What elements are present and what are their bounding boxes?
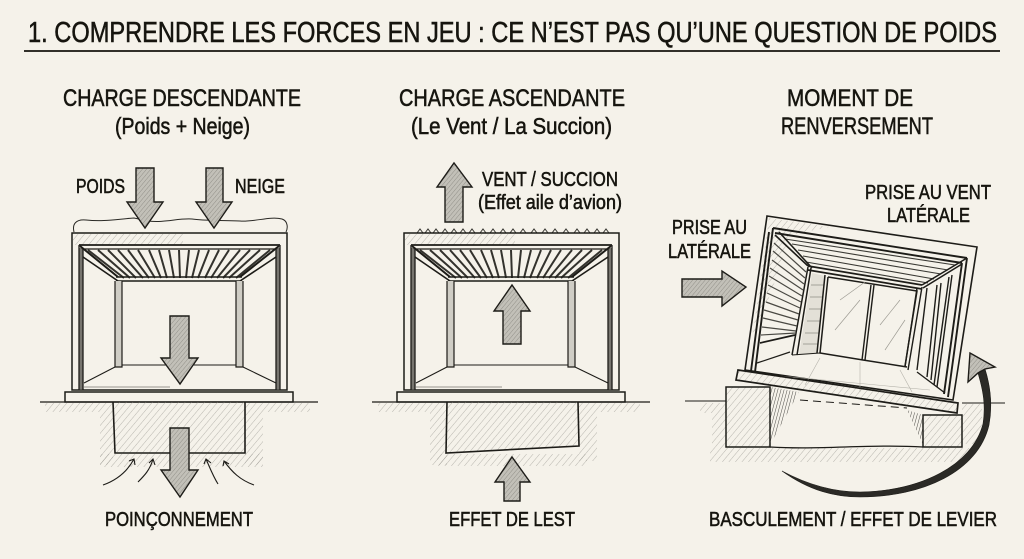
panel: charge ascendante: [372, 85, 650, 531]
heading: charge ascendante: CHARGE ASCENDANTE: [399, 85, 625, 112]
panel: moment de renversement: [668, 85, 1005, 531]
heading: charge descendante: (Poids + Neige): [115, 113, 250, 139]
heading: moment de renversement: MOMENT DE: [787, 85, 913, 112]
label: effet de lest: EFFET DE LEST: [449, 509, 575, 531]
label: poids: POIDS: [76, 176, 125, 198]
dashed original ground line: [800, 400, 907, 408]
label: vent succion: [478, 169, 622, 214]
label: vent succion: (Effet aile d’avion): [478, 192, 622, 214]
heading: charge descendante: CHARGE DESCENDANTE: [63, 85, 301, 112]
ground and foundation: [372, 402, 650, 466]
arrow: middle downward load: [161, 316, 198, 384]
pavilion structure: [397, 233, 625, 402]
right wall panels: [905, 275, 952, 387]
panel: charge descendante: [40, 85, 318, 531]
label: prise au laterale: PRISE AU: [672, 217, 747, 239]
label: prise au laterale: [668, 217, 751, 263]
glass doors: [817, 275, 917, 367]
tilted slab: [736, 370, 958, 413]
heading: charge ascendante: [399, 85, 625, 139]
label: poinconnement: POINÇONNEMENT: [105, 509, 253, 531]
label: prise au laterale: LATÉRALE: [668, 240, 751, 263]
label: prise au vent laterale: [865, 182, 991, 227]
icon: soil pressure arrows: [103, 459, 254, 485]
arrow: inner upward load: [494, 285, 530, 344]
arrow: vent: [437, 163, 472, 222]
arrow: poinconnement: [161, 428, 198, 497]
label: prise au vent laterale: LATÉRALE: [887, 204, 970, 227]
tilted pavilion structure: [745, 216, 977, 400]
roof slats: [785, 239, 955, 283]
roof suction ticks: [417, 229, 609, 233]
label: prise au vent laterale: PRISE AU VENT: [865, 182, 991, 204]
arrow: side wind: [682, 271, 746, 306]
label: vent succion: VENT / SUCCION: [482, 169, 618, 191]
heading: charge descendante: [63, 85, 301, 139]
label: neige: NEIGE: [235, 176, 285, 198]
left wall slats: [761, 243, 806, 335]
pavilion structure: [65, 233, 293, 402]
heading: charge ascendante: (Le Vent / La Succion): [411, 113, 612, 139]
ground and blocks: [685, 387, 1005, 462]
ground and foundation: [40, 402, 318, 467]
back slatted panel: [799, 273, 825, 355]
snow layer: [74, 218, 287, 232]
arrow: tipping rotation: [782, 353, 995, 497]
heading: moment de renversement: [781, 85, 933, 140]
arrow: poids: [127, 168, 163, 228]
arrow: effet de lest: [495, 457, 530, 501]
heading: moment de renversement: RENVERSEMENT: [781, 113, 933, 140]
arrow: neige: [196, 168, 232, 228]
front posts and top beam: [751, 228, 967, 397]
